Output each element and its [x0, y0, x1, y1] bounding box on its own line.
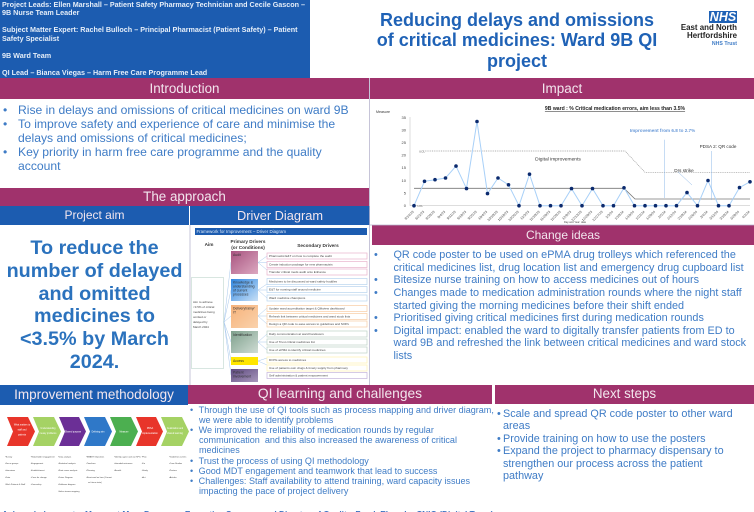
- diagram: methodology chevrons: shared learning: [167, 432, 184, 435]
- panel: project team: 9B Ward Team: [2, 51, 51, 60]
- text block: introduction bullets: account: [18, 159, 61, 173]
- chart: critical medication errors run chart: 3/18/24: [719, 210, 730, 221]
- chart: driver diagram: Aim: [205, 242, 213, 247]
- text block: project aim statement: number of delayed: [7, 260, 182, 282]
- heading: change ideas: [372, 225, 754, 245]
- text block: change ideas bullets: • Changes made to medication administration rounds where the night staff: [374, 287, 742, 299]
- chart: critical medication errors run chart: Improvement from 6.8 to 2.7%: [630, 128, 695, 133]
- chart: critical medication errors run chart: 8/28/23: [425, 210, 436, 221]
- text block: QI learning bullets: • Through the use of QI tools such as process mapping and driver diagram,: [190, 404, 494, 414]
- chart: driver diagram: processes: [233, 292, 249, 296]
- chart: critical medication errors run chart: 9/4/23: [437, 210, 446, 219]
- text block: introduction bullets: [3, 103, 349, 173]
- chart: critical medication errors run chart: 4/2/24: [741, 210, 751, 219]
- chart: critical medication errors run chart: 11/20/23: [539, 210, 551, 222]
- diagram: methodology chevrons: •Value stream mapping: [58, 490, 80, 493]
- chart: critical medication errors run chart: 2/19/24: [677, 210, 688, 221]
- diagram: methodology chevrons: •Case Studies: [169, 462, 182, 465]
- chart: critical medication errors run chart: 9B ward : % Critical medication errors, aim less than 3.5%: [545, 106, 686, 112]
- text block: introduction bullets: • To improve safety and experience of care and minimise the: [3, 117, 335, 131]
- chart: driver diagram: Pharmacist E&T on how to complete the audit: [269, 254, 332, 258]
- chart: critical medication errors run chart: 11/3/23: [520, 210, 530, 221]
- text block: change ideas bullets: • Prioritised giving critical medicines first during medication rounds: [374, 312, 704, 324]
- text block: project aim statement: 2024.: [70, 351, 119, 373]
- chart: critical medication errors run chart: Drs strike: [674, 168, 694, 173]
- diagram: methodology chevrons: What matters to: [14, 424, 31, 426]
- heading: next steps: [495, 385, 754, 404]
- text block: QI learning bullets: [190, 404, 494, 496]
- text block: change ideas bullets: • QR code poster to be used on ePMA drug trolleys which referenced the: [374, 249, 736, 261]
- chart: driver diagram: DOHs access to medicines: [269, 358, 307, 362]
- text block: introduction bullets: • Key priority in harm free care programme and the quality: [3, 145, 322, 159]
- text block: QI learning bullets: • Trust the process of using QI methodology: [190, 456, 369, 466]
- text block: change ideas bullets: lists: [394, 350, 412, 362]
- chart: driver diagram: understanding: [233, 284, 255, 288]
- text block: change ideas bullets: ward 9B and refreshed the link between critical medicines and ward stock: [394, 337, 746, 349]
- chart: critical medication errors run chart: 3/28/24: [729, 210, 740, 221]
- chart: driver diagram: Aim to achieve: [193, 300, 213, 304]
- chart: driver diagram: Transfer critical meds audit onto Enhance: [269, 270, 326, 274]
- text block: introduction bullets: delays and omissions of critical medicines;: [18, 131, 247, 145]
- text block: next steps bullets: [497, 408, 733, 482]
- text block: change ideas bullets: • Digital impact: enabled the ward to digitally transfer patients from ED to: [374, 325, 735, 337]
- title: [377, 10, 657, 71]
- text block: QI learning bullets: we were able to identify problems: [199, 415, 333, 425]
- chart: critical medication errors run chart: Day and Year: date: [564, 220, 587, 224]
- chart: critical medication errors run chart: Digital improvements: [535, 156, 581, 162]
- chart: critical medication errors run chart: 2/5/24: [657, 210, 667, 219]
- panel: project team: Subject Matter Expert: Rachel Bulloch – Principal Pharmacist (Patient Safety) – Patient: [2, 25, 298, 34]
- text block: introduction bullets: • Rise in delays and omissions of critical medicines on ward 9B: [3, 103, 349, 117]
- diagram: methodology chevrons: patients: [18, 434, 27, 436]
- chart: critical medication errors run chart: 2/26/24: [687, 210, 698, 221]
- diagram: methodology chevrons: •SMART Objectives: [86, 456, 104, 458]
- diagram: methodology chevrons: •Do: [142, 463, 146, 465]
- diagram: methodology chevrons: •Data: [5, 476, 11, 479]
- chart: driver diagram: Access: [233, 359, 244, 363]
- text block: next steps bullets: strengthen our process across the patient: [503, 458, 703, 470]
- chart: driver diagram: <3.5% of critical: [193, 305, 215, 309]
- chart: critical medication errors run chart: 1/22/24: [635, 210, 646, 221]
- logo: NHS trust: NHS Trust: [712, 40, 737, 46]
- diagram: methodology chevrons: Defining aim: [92, 432, 104, 434]
- chart: critical medication errors run chart: 11/10/23: [529, 210, 541, 222]
- text block: change ideas bullets: started giving the morning medicines before their shift ended: [394, 300, 684, 312]
- text block: project aim statement: To reduce the: [30, 237, 159, 259]
- logo: NHS trust: Hertfordshire: [687, 31, 737, 40]
- chart: driver diagram: March 2024: [193, 325, 209, 329]
- diagram: methodology chevrons: •Study: [142, 469, 149, 472]
- text block: QI learning bullets: communication and this also increased the awareness of critical: [199, 435, 457, 445]
- chart: critical medication errors run chart: 10/4/23: [477, 210, 488, 221]
- diagram: methodology chevrons: •Plan: [142, 456, 147, 458]
- chart: critical medication errors run chart: 10: [402, 178, 407, 183]
- diagram: methodology chevrons: •Establishment: [31, 469, 45, 472]
- chart: driver diagram: Create induction package for new pharmacists: [269, 263, 333, 267]
- chart: critical medication errors run chart: PDSA 2: QR code: [700, 144, 737, 149]
- diagram: methodology chevrons: •Root cause analysis: [58, 469, 77, 472]
- chart: driver diagram: Patient: [233, 370, 244, 374]
- panel: project team: Safety Specialist: [2, 34, 59, 43]
- heading: the approach: The approach: [143, 189, 226, 204]
- chart: driver diagram: Secondary Drivers: [297, 243, 339, 248]
- chart: critical medication errors run chart: 1/29/24: [645, 210, 656, 221]
- diagram: methodology chevrons: •Data analysis: [58, 456, 71, 458]
- chart: driver diagram: Deliverytrainy/: [233, 306, 255, 310]
- text block: QI learning bullets: • We improved the reliability of medication rounds by regular: [190, 425, 434, 435]
- heading: introduction: [0, 78, 369, 99]
- chart: critical medication errors run chart: 3/4/24: [699, 210, 709, 219]
- heading: introduction: Introduction: [150, 81, 219, 96]
- chart: critical medication errors run chart: 1/3/24: [605, 210, 614, 219]
- heading: project aim: [0, 206, 189, 225]
- diagram: methodology chevrons: •Identify, agree and use KPIs: [114, 456, 141, 458]
- diagram: methodology chevrons: •Case for change: [31, 476, 48, 479]
- text block: next steps bullets: areas: [503, 420, 530, 432]
- text block: QI learning bullets: impacting the pace of project delivery: [199, 486, 348, 496]
- chart: driver diagram: omitted or: [193, 315, 206, 319]
- text block: QI learning bullets: • Good MDT engagement and teamwork that lead to success: [190, 466, 437, 476]
- chart: driver diagram: Refresh link between critical medicines and ward stock lists: [269, 315, 351, 319]
- diagram: methodology chevrons: PDSA: [147, 427, 154, 430]
- logo: NHS trust: East and North: [681, 23, 737, 32]
- logo: NHS trust: NHS: [710, 10, 736, 24]
- diagram: methodology chevrons: •Guidelines events: [169, 456, 186, 458]
- chart: critical medication errors run chart: 1/10/24: [614, 210, 625, 221]
- chart: driver diagram: of current: [233, 288, 247, 292]
- panel: project team: [0, 0, 310, 78]
- diagram: methodology chevrons: Celebration and: [167, 427, 184, 430]
- text block: next steps bullets: •Scale and spread QR code poster to other ward: [497, 408, 733, 420]
- chart: driver diagram: IT: [233, 310, 236, 314]
- text block: QI learning bullets: • Challenges: Staff availability to attend training, ward capacity issues: [190, 476, 470, 486]
- text block: QI learning bullets: medicines: [199, 445, 240, 455]
- diagram: methodology chevrons: •Fishbone diagram: [58, 483, 76, 486]
- chart: critical medication errors run chart: 12/20/23: [581, 210, 593, 222]
- heading: driver diagram: Driver Diagram: [237, 208, 323, 223]
- text block: project aim statement: <3.5% by March: [20, 328, 169, 350]
- chart: critical medication errors run chart: 8/21/23: [414, 210, 425, 221]
- text block: change ideas bullets: [374, 249, 746, 362]
- text block: next steps bullets: pathway: [503, 470, 543, 482]
- chart: driver diagram: Daily communication at ward handovers: [269, 332, 324, 336]
- heading: impact: [370, 78, 754, 99]
- text block: next steps bullets: •Expand the project to pharmacy dispensary to: [497, 445, 724, 457]
- heading: improvement methodology: Improvement methodology: [14, 387, 174, 402]
- diagram: methodology chevrons: •Driver Diagram: [58, 476, 73, 479]
- diagram: methodology chevrons: •Ownership: [31, 483, 42, 486]
- heading: QI learning and challenges: [188, 385, 492, 404]
- chart: critical medication errors run chart: 30: [402, 128, 407, 132]
- chart: critical medication errors run chart: 2/12/24: [666, 210, 677, 221]
- chart: critical medication errors run chart: 10/10/23: [487, 210, 499, 222]
- text block: project aim statement: [7, 237, 182, 373]
- chart: driver diagram: delayed by: [193, 320, 208, 324]
- diagram: methodology chevrons: •Interviews: [5, 469, 15, 472]
- chart: critical medication errors run chart: 20: [402, 152, 407, 158]
- chart: driver diagram: Knowledge &: [233, 280, 254, 284]
- heading: impact: Impact: [542, 81, 582, 96]
- diagram: methodology chevrons: •Planning: [86, 470, 96, 472]
- diagram: methodology chevrons: Measure: [120, 430, 129, 434]
- chart: driver diagram: Ward medicine champions: [269, 296, 306, 300]
- diagram: methodology chevrons: •Articles: [169, 476, 177, 479]
- chart: driver diagram: Use of patients own drugs & timely supply from pharmacy: [269, 366, 348, 370]
- chart: critical medication errors run chart: Measure: [376, 110, 390, 114]
- title: of critical medicines: Ward 9B QI: [377, 30, 657, 50]
- text block: project aim statement: medicines to: [34, 305, 155, 327]
- diagram: methodology chevrons: implementation: [142, 432, 159, 435]
- chart: critical medication errors run chart: 9/18/23: [456, 210, 467, 221]
- chart: driver diagram: E&T for nursing staff around medicine: [269, 288, 321, 292]
- diagram: methodology chevrons: •Survey: [5, 456, 13, 458]
- heading: the approach: [0, 188, 369, 206]
- diagram: methodology chevrons: vs future state): [88, 481, 102, 484]
- chart: critical medication errors run chart: 8/14/23: [404, 210, 415, 221]
- diagram: methodology chevrons: Understanding: [41, 427, 56, 430]
- chart: critical medication errors run chart: 1/19/24: [624, 210, 635, 221]
- chart: driver diagram: Design a QR code to ease access to guidelines and SOPs: [269, 322, 349, 326]
- heading: improvement methodology: [0, 385, 188, 405]
- title: project: [487, 51, 547, 71]
- chart: critical medication errors run chart: 12/27/23: [592, 210, 604, 222]
- chart: driver diagram: Use of ePMA to identify critical medicines: [269, 348, 326, 352]
- text block: next steps bullets: •Provide training on how to use the posters: [497, 432, 706, 444]
- diagram: methodology chevrons: messy problems: [40, 432, 57, 435]
- chart: critical medication errors run chart: 10/26/23: [508, 210, 520, 222]
- heading: project aim: Project aim: [64, 208, 125, 222]
- title: Reducing delays and omissions: [380, 10, 654, 30]
- heading: change ideas: Change ideas: [526, 228, 600, 242]
- chart: driver diagram: Audit: [233, 253, 241, 257]
- panel: project team: QI Lead – Bianca Viegas – Harm Free Care Programme Lead: [2, 68, 207, 77]
- chart: critical medication errors run chart: 3/11/24: [709, 210, 719, 221]
- diagram: methodology chevrons: •Benefit: [114, 469, 122, 472]
- text block: change ideas bullets: critical medicines list, drug location list and emergency drug cupboard list: [394, 262, 744, 274]
- diagram: methodology chevrons: •Structured on how (Current: [86, 476, 112, 479]
- heading: next steps: Next steps: [593, 386, 656, 401]
- diagram: methodology chevrons: •Focus groups: [5, 462, 18, 465]
- diagram: methodology chevrons: •Act: [142, 476, 146, 479]
- heading: QI learning and challenges: QI learning and challenges: [258, 386, 422, 401]
- chart: driver diagram: Update ward accreditation target & Qlikview dashboard: [269, 307, 345, 311]
- chart: driver diagram: Use of Trust critical medicines list: [269, 340, 315, 344]
- chart: driver diagram: Self administration & patient empowerment: [269, 374, 328, 378]
- heading: driver diagram: [190, 206, 370, 225]
- chart: driver diagram: Primary Drivers: [231, 239, 266, 244]
- diagram: methodology chevrons: Shared purpose: [65, 430, 82, 434]
- chart: driver diagram: involvement: [233, 374, 251, 378]
- chart: driver diagram: medicines being: [193, 310, 215, 314]
- chart: driver diagram: Identification: [233, 333, 252, 337]
- diagram: methodology chevrons: staff and: [18, 428, 27, 432]
- logo: NHS trust: [681, 10, 737, 46]
- chart: critical medication errors run chart: 11/28/23: [550, 210, 562, 222]
- chart: critical medication errors run chart: 9/11/23: [446, 210, 457, 221]
- diagram: methodology chevrons: •Timelines: [86, 463, 96, 465]
- chart: driver diagram: (or Conditions): [231, 245, 265, 250]
- diagram: methodology chevrons: •Posters: [169, 469, 177, 472]
- diagram: methodology chevrons: •Engagement: [31, 462, 44, 465]
- chart: critical medication errors run chart: 9/25/23: [467, 210, 478, 221]
- chart: critical medication errors run chart: 12/13/23: [571, 210, 583, 222]
- chart: critical medication errors run chart: 5: [404, 190, 407, 196]
- chart: driver diagram: Framework for Improvement – Driver Diagram: [196, 229, 286, 234]
- chart: critical medication errors run chart: UCL: [419, 150, 425, 154]
- chart: critical medication errors run chart: 0: [404, 203, 407, 208]
- diagram: methodology chevrons: •Intended outcomes: [114, 462, 132, 465]
- chart: critical medication errors run chart: 35: [402, 115, 407, 120]
- panel: project team: 9B Nurse Team Leader: [2, 8, 79, 17]
- chart: critical medication errors run chart: 10/18/23: [497, 210, 509, 222]
- text block: project aim statement: and omitted: [38, 283, 151, 305]
- chart: critical medication errors run chart: 15: [402, 165, 407, 170]
- diagram: methodology chevrons: •Stakeholder engagement: [31, 456, 55, 458]
- diagram: methodology chevrons: •Wish Patients & Staff: [5, 483, 26, 486]
- text block: change ideas bullets: • Bitesize nurse training on how to access medicines out of hours: [374, 274, 699, 286]
- chart: critical medication errors run chart: LCL: [417, 204, 423, 208]
- chart: driver diagram: Medicines to be discussed at ward safety huddles: [269, 280, 338, 284]
- chart: critical medication errors run chart: 25: [402, 140, 407, 145]
- diagram: methodology chevrons: •Statistical analysis: [58, 462, 76, 465]
- chart: critical medication errors run chart: 12/8/23: [561, 210, 572, 221]
